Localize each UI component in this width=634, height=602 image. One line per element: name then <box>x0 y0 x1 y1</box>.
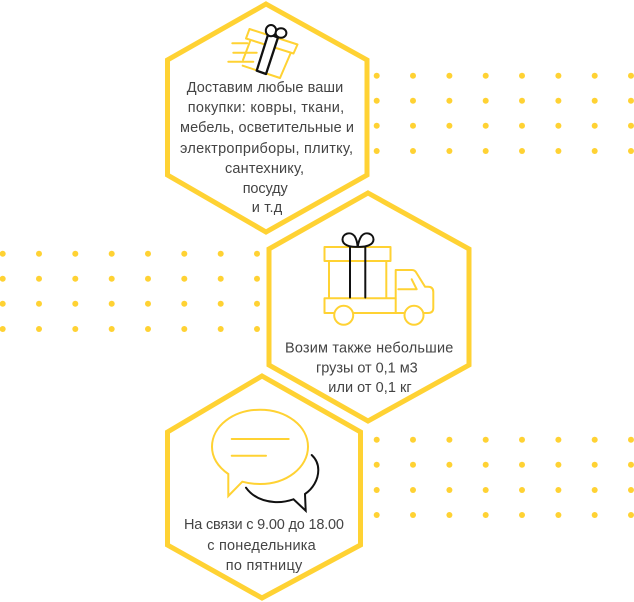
dot grid: top right <box>374 73 634 154</box>
text: delivery description: и т.д <box>252 200 283 216</box>
icon: flying gift box <box>228 25 298 78</box>
icon: speech bubbles <box>212 410 318 511</box>
panel: contact hours <box>168 376 360 598</box>
text: cargo description <box>285 341 453 396</box>
text: delivery description: Доставим любые ваши <box>187 80 343 96</box>
panel: delivery of any purchases <box>168 4 367 232</box>
text: contact hours description: На связи с 9.00 до 18.00 <box>184 517 344 533</box>
text: cargo description: или от 0,1 кг <box>328 380 412 396</box>
icon: truck carrying gift <box>324 233 433 325</box>
text: contact hours description: по пятницу <box>226 558 303 574</box>
text: delivery description: посуду <box>243 181 288 197</box>
hexagon outline: top <box>168 4 367 232</box>
text: contact hours description <box>184 517 344 574</box>
text: delivery description: покупки: ковры, ткани, <box>188 100 344 116</box>
panel: small cargo <box>269 193 469 421</box>
hexagon outline: middle <box>269 193 469 421</box>
text: delivery description: мебель, осветительные и <box>180 120 354 136</box>
text: cargo description: грузы от 0,1 м3 <box>316 361 418 377</box>
dot grid: middle left <box>0 251 260 332</box>
text: delivery description <box>180 80 354 216</box>
dot grid: bottom right <box>374 437 634 518</box>
text: cargo description: Возим также небольшие <box>285 341 453 357</box>
text: delivery description: электроприборы, плитку, <box>180 141 353 157</box>
text: delivery description: сантехнику, <box>225 161 304 177</box>
text: contact hours description: с понедельника <box>207 538 317 554</box>
hexagon outline: bottom <box>168 376 360 598</box>
